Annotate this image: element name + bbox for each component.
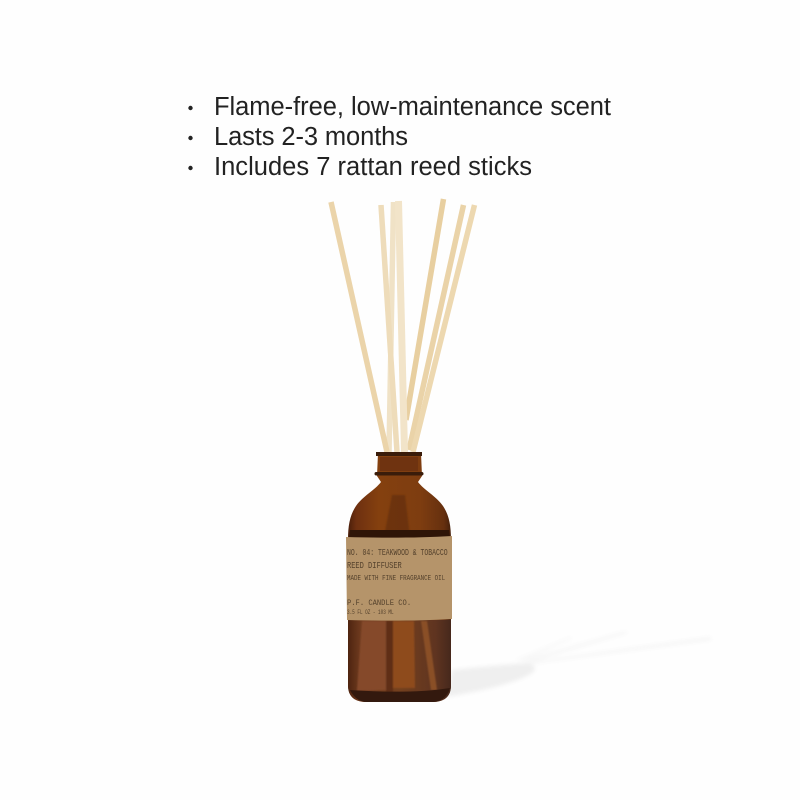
reed 7: [413, 205, 474, 452]
bottle body: [348, 453, 451, 702]
reed shape left: [357, 621, 386, 691]
base shadow: [350, 688, 450, 702]
reed 4: [398, 201, 404, 452]
reed sticks: [331, 199, 474, 452]
inner reed reflection: [384, 495, 410, 537]
reed shape centre: [386, 621, 393, 693]
neck glass highlight: [380, 457, 418, 471]
neck ring top: [376, 452, 422, 456]
amber bottle: [348, 452, 451, 702]
bullet list: [188, 93, 611, 181]
bullet 2: Lasts 2-3 months: [214, 123, 408, 151]
reed shape right: [393, 621, 415, 688]
label text: [347, 548, 448, 616]
label brand: P.F. CANDLE CO.: [347, 599, 411, 608]
rear reed: [389, 202, 394, 452]
reed shape far right: [421, 621, 437, 690]
label volume: 3.5 FL OZ - 103 ML: [347, 609, 394, 616]
reed 6: [409, 205, 464, 450]
reed 1: [331, 202, 387, 452]
reed 5: [406, 199, 444, 420]
bullet 1: Flame-free, low-maintenance scent: [214, 93, 611, 121]
shadow of bottle and reeds: [447, 631, 712, 697]
dark liquid line: [349, 530, 450, 538]
lower bottle liquid: [348, 620, 451, 702]
label type: REED DIFFUSER: [347, 560, 402, 571]
neck ring lower: [374, 472, 424, 476]
label note: MADE WITH FINE FRAGRANCE OIL: [347, 574, 445, 583]
reed 2: [381, 205, 397, 452]
kraft label: [346, 536, 452, 621]
bullet 3: Includes 7 rattan reed sticks: [214, 153, 532, 181]
label paper: [346, 536, 452, 621]
label product name: NO. 04: TEAKWOOD & TOBACCO: [347, 548, 448, 559]
